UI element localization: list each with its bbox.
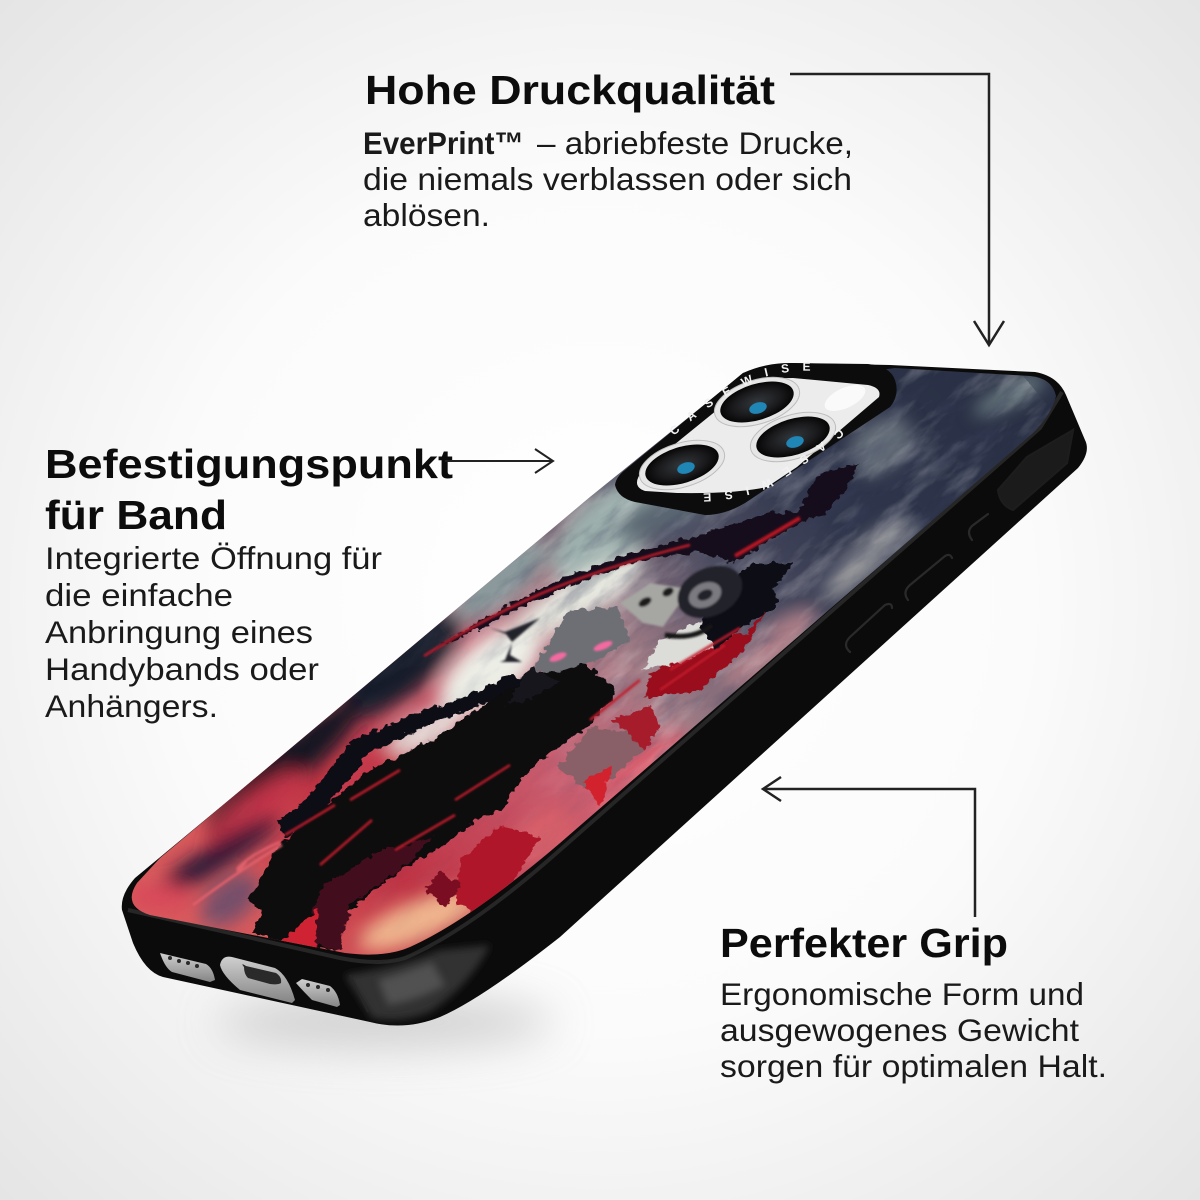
phone case illustration [122, 362, 1087, 1026]
robe dark red [305, 838, 432, 950]
heading: strap attachment [45, 441, 453, 538]
side buttons [846, 430, 1073, 652]
text block: print quality [363, 125, 853, 233]
arrow: strap attachment [445, 449, 553, 473]
camera lens left [633, 431, 731, 499]
brand text on ring: CASEWISE [670, 362, 810, 434]
headphone [676, 564, 742, 620]
bottom ports [160, 953, 340, 1007]
eyes [592, 639, 614, 653]
arrow: print quality [790, 74, 1004, 345]
scythe [422, 463, 860, 657]
head [533, 607, 630, 672]
heading: print quality: Hohe Druckqualität [365, 67, 775, 113]
lower red swirl [455, 825, 540, 918]
brand text on ring: CASEWISE [704, 430, 843, 502]
white area [641, 620, 728, 670]
callout: print quality [363, 67, 853, 233]
red hair [645, 605, 770, 698]
text block: strap attachment: Anbringung eines [45, 614, 313, 650]
camera lens upper [708, 368, 806, 436]
camera lens right [744, 403, 842, 471]
text block: print quality: EverPrint™ [363, 125, 524, 161]
text block: grip: Ergonomische Form und [720, 976, 1084, 1012]
text block: strap attachment [45, 540, 382, 724]
camera island [615, 362, 897, 515]
text block: strap attachment: Handybands oder [45, 651, 319, 687]
arrow: grip [763, 777, 975, 917]
dress [557, 727, 650, 788]
text block: strap attachment: Integrierte Öffnung für [45, 540, 382, 576]
scythe red edge [424, 545, 690, 656]
robe [248, 660, 617, 950]
text block: strap attachment: die einfache [45, 577, 233, 613]
skull [620, 583, 683, 627]
heading: strap attachment: Befestigungspunkt [45, 441, 453, 487]
brand text on ring [670, 362, 843, 502]
text block: print quality: die niemals verblassen oder sich [363, 161, 852, 197]
character figure [248, 463, 860, 950]
red streaks in the robe [285, 628, 740, 865]
text block: grip: ausgewogenes Gewicht [720, 1012, 1079, 1048]
heading: strap attachment: für Band [45, 492, 227, 538]
callout: strap attachment [45, 441, 453, 724]
cloud texture [418, 369, 1050, 846]
text block: print quality: ablösen. [363, 197, 490, 233]
text block: strap attachment: Anhängers. [45, 688, 218, 724]
text block: grip [720, 976, 1107, 1084]
gear arm [700, 563, 793, 650]
sky colour areas [128, 368, 1050, 963]
heading: grip: Perfekter Grip [720, 920, 1008, 966]
callout: grip [720, 920, 1107, 1084]
bats [490, 618, 540, 662]
red hook [193, 842, 282, 905]
phone shadow [215, 996, 555, 1048]
text block: print quality: – abriebfeste Drucke, [537, 125, 853, 161]
case body [122, 363, 1087, 1026]
text block: grip: sorgen für optimalen Halt. [720, 1048, 1107, 1084]
chain [277, 675, 535, 838]
printed artwork on the back [132, 368, 1056, 955]
